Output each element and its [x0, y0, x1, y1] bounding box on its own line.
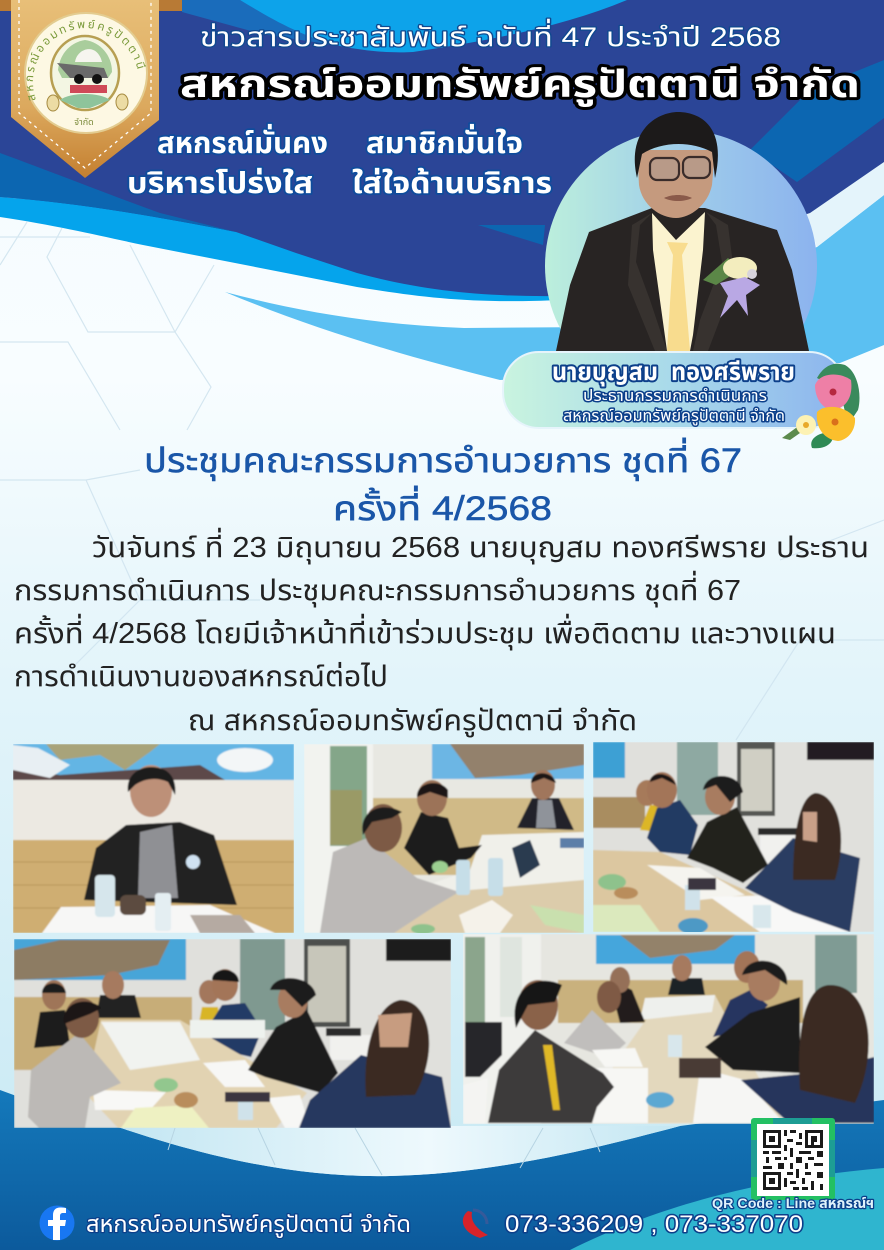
phone numbers: 073-336209 , 073-337070: [505, 1211, 803, 1238]
slogan: บริหารโปร่งใส: [127, 168, 313, 200]
newsletter issue line: ข่าวสารประชาสัมพันธ์ ฉบับที่ 47 ประจำปี 2568: [200, 18, 781, 52]
facebook page name: สหกรณ์ออมทรัพย์ครูปัตตานี จำกัด: [86, 1211, 411, 1239]
name plate: สหกรณ์ออมทรัพย์ครูปัตตานี จำกัด: [563, 408, 785, 425]
photo 2: committee table left view: [304, 744, 584, 934]
logo seal: จำกัด: [74, 117, 94, 127]
photo 1: chairman at table: [13, 744, 294, 933]
corsage: [703, 257, 760, 318]
portrait of chairman: [545, 112, 817, 402]
body paragraph: ณ สหกรณ์ออมทรัพย์ครูปัตตานี จำกัด: [188, 705, 637, 738]
organisation title: สหกรณ์ออมทรัพย์ครูปัตตานี จำกัด: [180, 64, 860, 107]
name plate: [503, 352, 845, 428]
logo seal: [24, 12, 148, 134]
bottom wave band: [0, 1090, 884, 1250]
slogan: สมาชิกมั่นใจ: [366, 123, 523, 160]
slogan: สหกรณ์มั่นคง: [157, 123, 328, 160]
QR code: [751, 1118, 835, 1200]
icon: flowers: [782, 364, 859, 448]
body paragraph: วันจันทร์ ที่ 23 มิถุนายน 2568 นายบุญสม ทองศรีพราย ประธาน: [92, 527, 869, 564]
logo ribbon badge: [0, 0, 182, 178]
icon: phone: [463, 1210, 488, 1238]
header wave shapes: [0, 0, 884, 380]
photo 5: long table view: [463, 934, 874, 1124]
body paragraph: ครั้งที่ 4/2568 โดยมีเจ้าหน้าที่เข้าร่วมประชุม เพื่อติดตาม และวางแผน: [14, 613, 836, 650]
photo 4: wide committee table: [14, 939, 451, 1128]
body paragraph: [14, 527, 869, 738]
icon: facebook: [40, 1206, 74, 1240]
slogan: [127, 123, 552, 200]
heading: ประชุมคณะกรรมการอำนวยการ ชุดที่ 67: [144, 437, 742, 481]
photo 3: committee table right view: [593, 742, 874, 934]
body paragraph: การดำเนินงานของสหกรณ์ต่อไป: [14, 661, 388, 693]
QR caption: QR Code : Line สหกรณ์ฯ: [712, 1195, 874, 1211]
slogan: ใส่ใจด้านบริการ: [352, 168, 552, 200]
heading: ครั้งที่ 4/2568: [333, 485, 552, 528]
hexagon background pattern: [0, 222, 884, 740]
name plate: นายบุญสม ทองศรีพราย: [552, 358, 795, 387]
body paragraph: กรรมการดำเนินการ ประชุมคณะกรรมการอำนวยการ ชุดที่ 67: [14, 570, 741, 607]
logo seal: สหกรณ์ออมทรัพย์ครูปัตตานี: [26, 20, 146, 101]
heading: [144, 437, 742, 528]
name plate: ประธานกรรมการดำเนินการ: [583, 388, 767, 405]
